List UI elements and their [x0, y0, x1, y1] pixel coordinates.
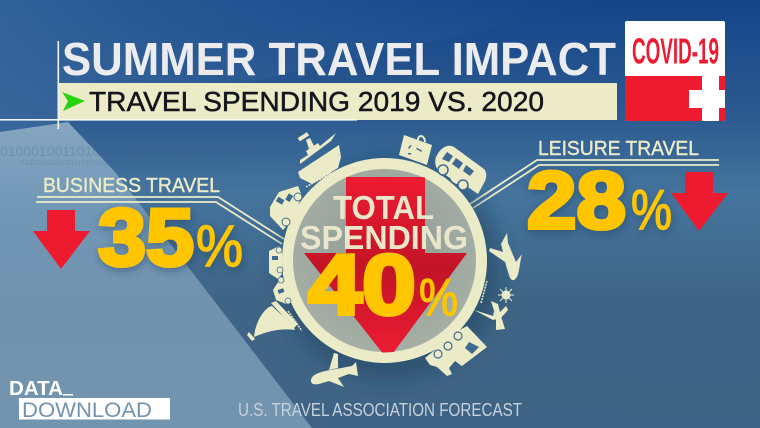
leisure travel label: LEISURE TRAVEL: [538, 138, 699, 160]
binary code texture: [0, 143, 286, 167]
total spending heading: TOTAL: [333, 189, 434, 226]
ring: [288, 164, 482, 358]
icon: airplane lower: [311, 353, 358, 387]
total spending heading: SPENDING: [300, 219, 468, 256]
total spending value: [308, 238, 458, 333]
icon: suitcase: [399, 135, 432, 165]
icon: sailboat: [247, 301, 302, 341]
icon: airplane right: [489, 233, 522, 280]
icon: bus: [435, 146, 486, 194]
data download logo: DOWNLOAD: [22, 399, 152, 422]
COVID-19 badge: [625, 21, 725, 121]
icon: red down arrow: [671, 172, 728, 231]
data download logo: DATA: [9, 378, 63, 400]
icon: palm tree: [474, 281, 508, 330]
panel: business travel: [33, 174, 284, 283]
icon: train: [425, 326, 487, 376]
leisure travel value: [527, 156, 672, 246]
business travel value: 35: [98, 193, 194, 283]
icon: car: [270, 186, 302, 230]
icon: cruise ship: [298, 132, 341, 187]
icon: small car: [273, 277, 292, 304]
subtitle bar: [59, 83, 617, 120]
icon: green arrow: [62, 92, 85, 111]
total spending heading: [300, 189, 468, 256]
business travel value: [98, 193, 243, 283]
business travel label: BUSINESS TRAVEL: [43, 174, 220, 197]
icon: white cross: [689, 76, 725, 121]
leisure travel connector lines: [470, 160, 719, 208]
leisure travel value: 28: [527, 156, 626, 246]
title: SUMMER TRAVEL IMPACT: [62, 33, 616, 85]
panel: total spending: [278, 156, 502, 380]
binary code texture: 010100110110001010100110100101001010011010010100101101: [20, 158, 242, 167]
binary code texture: 010001001101001101000101010 .010001001: [0, 143, 286, 159]
total spending value: 40: [308, 238, 416, 333]
background diagonal light panel: [0, 122, 312, 428]
big red arrow: [304, 177, 467, 360]
total spending value: %: [419, 269, 458, 327]
leisure travel value: %: [631, 178, 672, 242]
panel: leisure travel: [470, 138, 728, 246]
business travel connector lines: [36, 197, 284, 244]
icon: red down arrow: [33, 210, 90, 269]
icon: sun: [498, 287, 514, 303]
business travel value: %: [196, 214, 243, 279]
icon: small car: [269, 246, 283, 279]
data download logo: [9, 378, 170, 422]
source line: U.S. TRAVEL ASSOCIATION FORECAST: [238, 400, 522, 420]
subtitle text: TRAVEL SPENDING 2019 VS. 2020: [89, 86, 544, 117]
ring of travel icons: [247, 132, 522, 387]
